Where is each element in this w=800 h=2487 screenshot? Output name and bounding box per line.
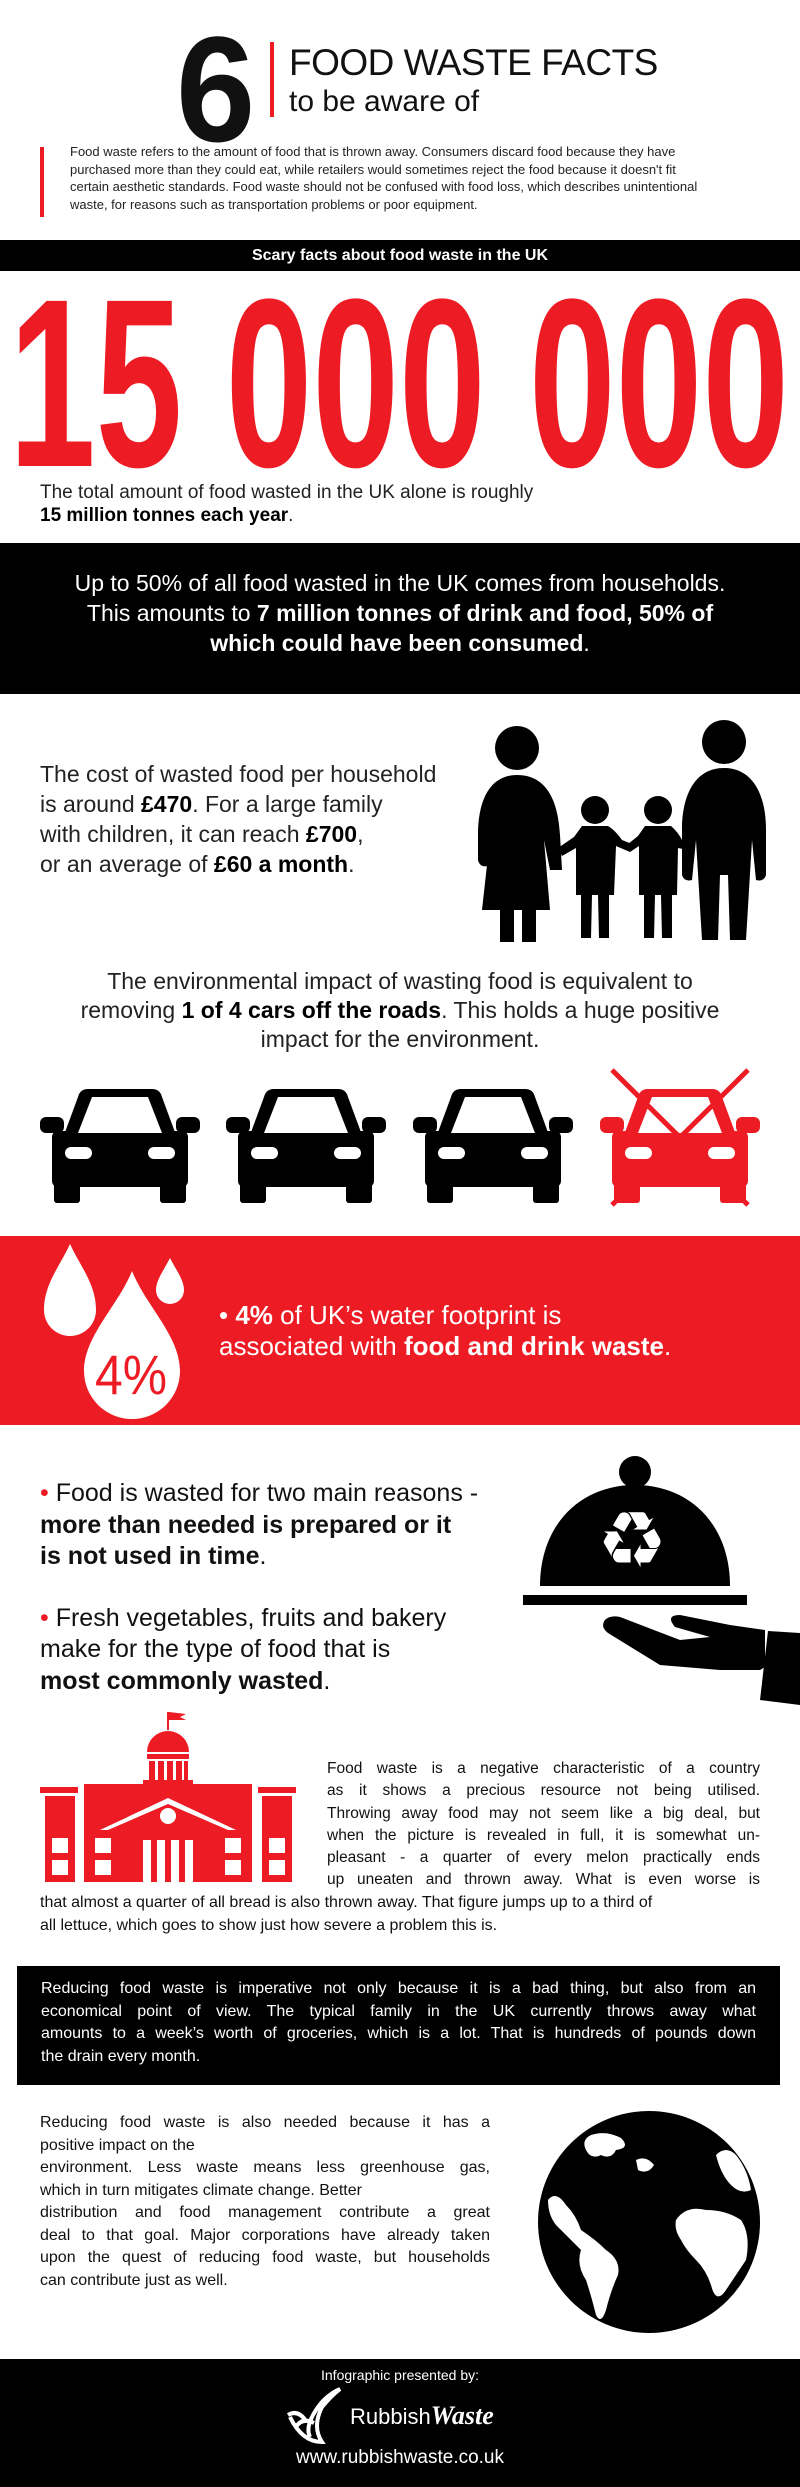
caption total tonnes xyxy=(40,482,534,526)
intro paragraph: certain aesthetic standards. Food waste should not be confused with food loss, which describes unintentional xyxy=(70,179,697,194)
caption total tonnes: 15 million tonnes each year. xyxy=(40,505,293,526)
footer: logo: RubbishWaste xyxy=(350,2401,494,2430)
title: big 6: 6 xyxy=(176,5,251,173)
car 3 xyxy=(413,1089,573,1207)
panel: households black box: Up to 50% of all food wasted in the UK comes from households. xyxy=(75,570,725,596)
text: reasons bullets: • Food is wasted for two main reasons - xyxy=(40,1479,478,1507)
panel: households black box xyxy=(0,543,800,694)
section header band xyxy=(0,240,800,271)
car 4 crossed red xyxy=(600,1070,760,1207)
panel: economical black box: the drain every month. xyxy=(41,2048,200,2065)
text: environment paragraph: upon the quest of reducing food waste, but households xyxy=(40,2249,490,2266)
panel: households black box: which could have been consumed. xyxy=(210,630,590,656)
text: environment paragraph: distribution and food management contribute a great xyxy=(40,2204,490,2221)
text: negative characteristic paragraph: Throwing away food may not seem like a big deal, but xyxy=(327,1805,760,1822)
text: environmental impact cars: removing 1 of 4 cars off the roads. This holds a huge positive xyxy=(81,997,719,1023)
text: water footprint xyxy=(219,1300,671,1361)
text: reasons bullets: most commonly wasted. xyxy=(40,1666,330,1694)
text: paragraph continuation: all lettuce, which goes to show just how severe a problem this is. xyxy=(40,1916,497,1934)
intro paragraph: waste, for reasons such as transportation problems or poor equipment. xyxy=(70,197,478,212)
text: reasons bullets xyxy=(40,1479,478,1694)
icon: cloche with recycle and hand xyxy=(523,1456,800,1705)
intro paragraph: Food waste refers to the amount of food that is thrown away. Consumers discard food because they have xyxy=(70,144,675,159)
panel: economical black box xyxy=(17,1966,780,2085)
text: cost per household: is around £470. For a large family xyxy=(40,791,383,817)
text: negative characteristic paragraph: up uneaten and thrown away. What is even worse is xyxy=(327,1871,760,1888)
footer xyxy=(0,2359,800,2487)
text: negative characteristic paragraph: pleasant - a quarter of every melon practically ends xyxy=(327,1849,760,1866)
icon row: cars xyxy=(40,1068,760,1207)
text: environment paragraph: which in turn mitigates climate change. Better xyxy=(40,2182,362,2198)
text: negative characteristic paragraph xyxy=(327,1760,760,1888)
section header band: Scary facts about food waste in the UK xyxy=(252,247,548,264)
text: environmental impact cars: The environmental impact of wasting food is equivalent to xyxy=(107,968,693,994)
text: environment paragraph: environment. Less waste means less greenhouse gas, xyxy=(40,2159,490,2176)
text: environment paragraph: deal to that goal. Major corporations have already taken xyxy=(40,2226,490,2244)
title divider red bar xyxy=(270,42,274,117)
text: reasons bullets: is not used in time. xyxy=(40,1542,266,1570)
text: water footprint: • 4% of UK’s water footprint is xyxy=(219,1300,561,1330)
footer: logo xyxy=(287,2387,494,2444)
panel: economical black box: Reducing food waste is imperative not only because it is a bad thing, but also from an xyxy=(41,1980,756,1997)
text: paragraph continuation xyxy=(40,1894,652,1934)
icon: water drops with 4%: 4% xyxy=(95,1343,167,1406)
title text xyxy=(289,42,658,118)
icon: red building xyxy=(40,1712,296,1882)
title text: to be aware of xyxy=(289,85,479,118)
footer: presented by: Infographic presented by: xyxy=(321,2367,479,2383)
text: cost per household: The cost of wasted food per household xyxy=(40,761,436,787)
text: reasons bullets: more than needed is prepared or it xyxy=(40,1510,451,1538)
text: environment paragraph: Reducing food waste is also needed because it has a xyxy=(40,2114,490,2131)
panel: economical black box: economical point of view. The typical family in the UK currently throws away what xyxy=(41,2003,756,2020)
panel: economical black box: amounts to a week’s worth of groceries, which is a lot. That is hundreds of pounds down xyxy=(41,2025,756,2042)
text: environment paragraph: positive impact on the xyxy=(40,2136,195,2154)
text: environment paragraph xyxy=(40,2114,490,2288)
text: paragraph continuation: that almost a quarter of all bread is also thrown away. That figure jumps up to a third of xyxy=(40,1894,652,1911)
intro paragraph: purchased more than they could eat, while retailers would sometimes reject the food because it doesn't fit xyxy=(70,162,676,177)
text: environment paragraph: can contribute just as well. xyxy=(40,2272,228,2288)
text: negative characteristic paragraph: Food waste is a negative characteristic of a country xyxy=(327,1760,760,1777)
text: negative characteristic paragraph: as it shows a precious resource not being utilised. xyxy=(327,1782,760,1799)
text: environmental impact cars: impact for the environment. xyxy=(261,1026,539,1052)
icon: globe xyxy=(538,2111,760,2333)
text: cost per household xyxy=(40,761,436,877)
footer: url: www.rubbishwaste.co.uk xyxy=(296,2447,504,2468)
car 1 xyxy=(40,1089,200,1207)
text: cost per household: with children, it can reach £700, xyxy=(40,821,363,847)
intro paragraph xyxy=(70,144,697,212)
text: negative characteristic paragraph: when the picture is revealed in full, it is somewhat un- xyxy=(327,1827,760,1844)
panel: households black box: This amounts to 7 million tonnes of drink and food, 50% of xyxy=(87,600,713,626)
panel: water footprint red band xyxy=(0,1236,800,1425)
intro red bar xyxy=(40,147,44,217)
text: reasons bullets: • Fresh vegetables, fruits and bakery xyxy=(40,1604,446,1632)
car 2 xyxy=(226,1089,386,1207)
text: cost per household: or an average of £60 a month. xyxy=(40,851,355,877)
text: water footprint: associated with food and drink waste. xyxy=(219,1331,671,1361)
text: environmental impact cars xyxy=(81,968,719,1052)
caption total tonnes: The total amount of food wasted in the UK alone is roughly xyxy=(40,482,533,503)
icon: cloche with recycle and hand: ♻ xyxy=(597,1496,667,1586)
text: reasons bullets: make for the type of food that is xyxy=(40,1635,390,1663)
icon: family xyxy=(478,720,766,942)
icon: water drops with 4% xyxy=(44,1244,184,1419)
title text: FOOD WASTE FACTS xyxy=(289,42,658,83)
